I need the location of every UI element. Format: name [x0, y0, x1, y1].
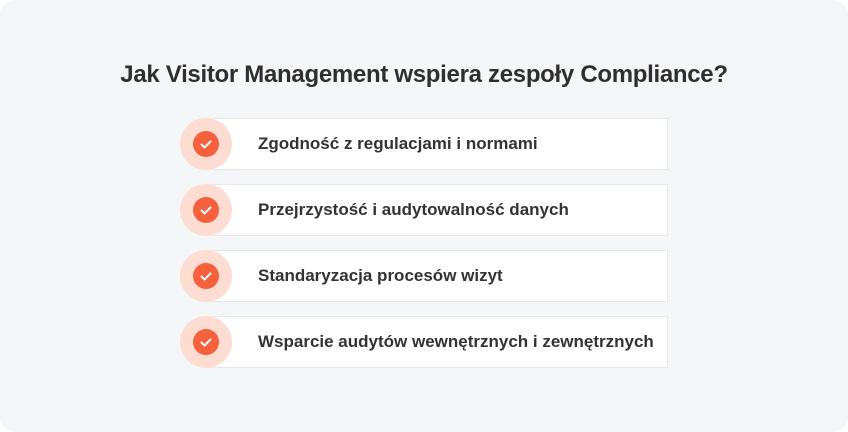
icon: check 2: [180, 184, 232, 236]
item 2: [180, 184, 668, 236]
title: Jak Visitor Management wspiera zespoły Compliance?: [120, 61, 728, 88]
icon: check 3: [180, 250, 232, 302]
card 3: [213, 250, 668, 302]
card 4: [213, 316, 668, 368]
card 3: Standaryzacja procesów wizyt: [258, 266, 503, 285]
item 1: [180, 118, 668, 170]
item 3: [180, 250, 668, 302]
card 2: [213, 184, 668, 236]
card 1: [213, 118, 668, 170]
card 1: Zgodność z regulacjami i normami: [258, 134, 538, 153]
card 2: Przejrzystość i audytowalność danych: [258, 200, 569, 219]
icon: check 1: [180, 118, 232, 170]
card 4: Wsparcie audytów wewnętrznych i zewnętrznych: [258, 332, 654, 351]
item 4: [180, 316, 668, 368]
icon: check 4: [180, 316, 232, 368]
